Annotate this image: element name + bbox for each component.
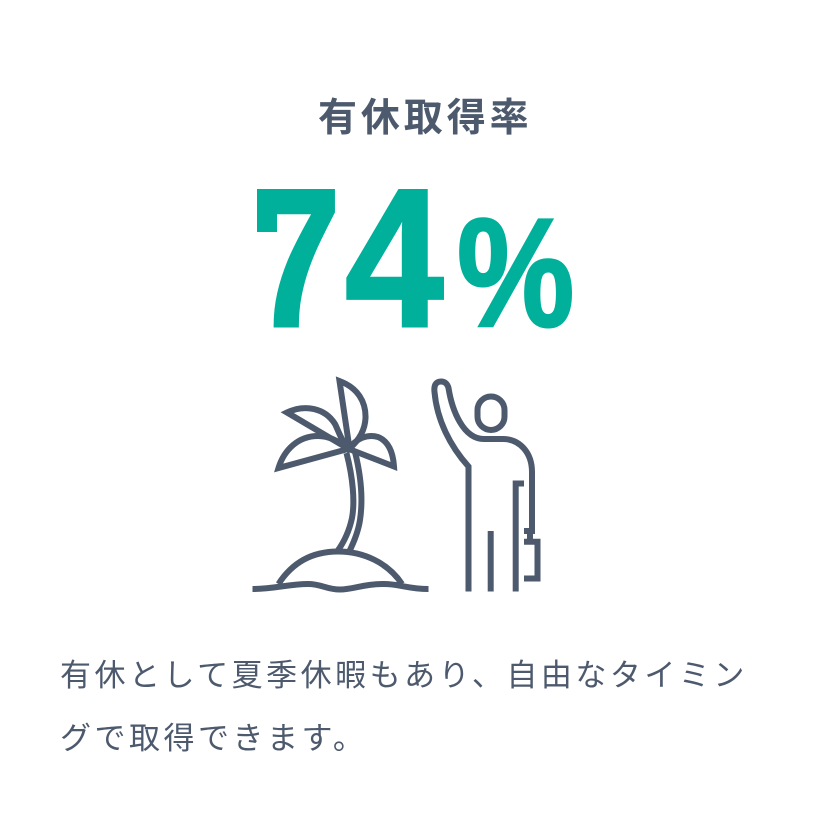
title: 有休取得率 (318, 97, 533, 140)
big number: 74%: % (457, 187, 574, 359)
big number: 74% (252, 147, 574, 368)
big number: 74%: 7 (252, 148, 341, 368)
big number: 74%: 4 (345, 147, 444, 368)
icon: person raising arm with bag (434, 382, 538, 592)
icon: palm tree on island (252, 381, 428, 590)
description text: 有休として夏季休暇もあり、自由なタイミン (60, 658, 748, 693)
description text: グで取得できます。 (60, 721, 367, 756)
